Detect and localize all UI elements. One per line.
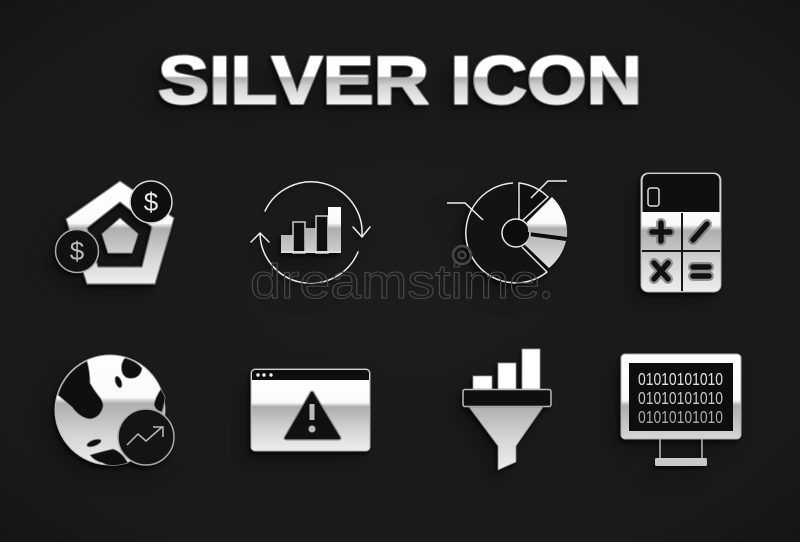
icon: pie chart with callouts <box>447 181 567 283</box>
icon: pentagon radar chart with dollar coins <box>56 181 174 284</box>
binary code text: 01010101010 <box>638 388 723 408</box>
binary code text: 01010101010 <box>638 407 723 427</box>
icon: monitor with binary code <box>621 354 741 466</box>
watermark: dreamstime <box>250 256 540 309</box>
icon: globe with growth badge <box>55 355 174 466</box>
icon: funnel with bars <box>463 349 551 470</box>
icon: circular arrows around bar chart <box>251 182 370 283</box>
icon: pentagon radar chart with dollar coins: $ <box>144 187 159 217</box>
title: SILVER ICON <box>158 42 642 118</box>
icon: browser window with warning <box>251 369 370 451</box>
binary code text <box>638 369 723 427</box>
icon: calculator <box>641 173 721 292</box>
icon: pentagon radar chart with dollar coins: $ <box>70 236 85 266</box>
title: SILVER ICON <box>158 42 642 118</box>
binary code text: 01010101010 <box>638 369 723 389</box>
